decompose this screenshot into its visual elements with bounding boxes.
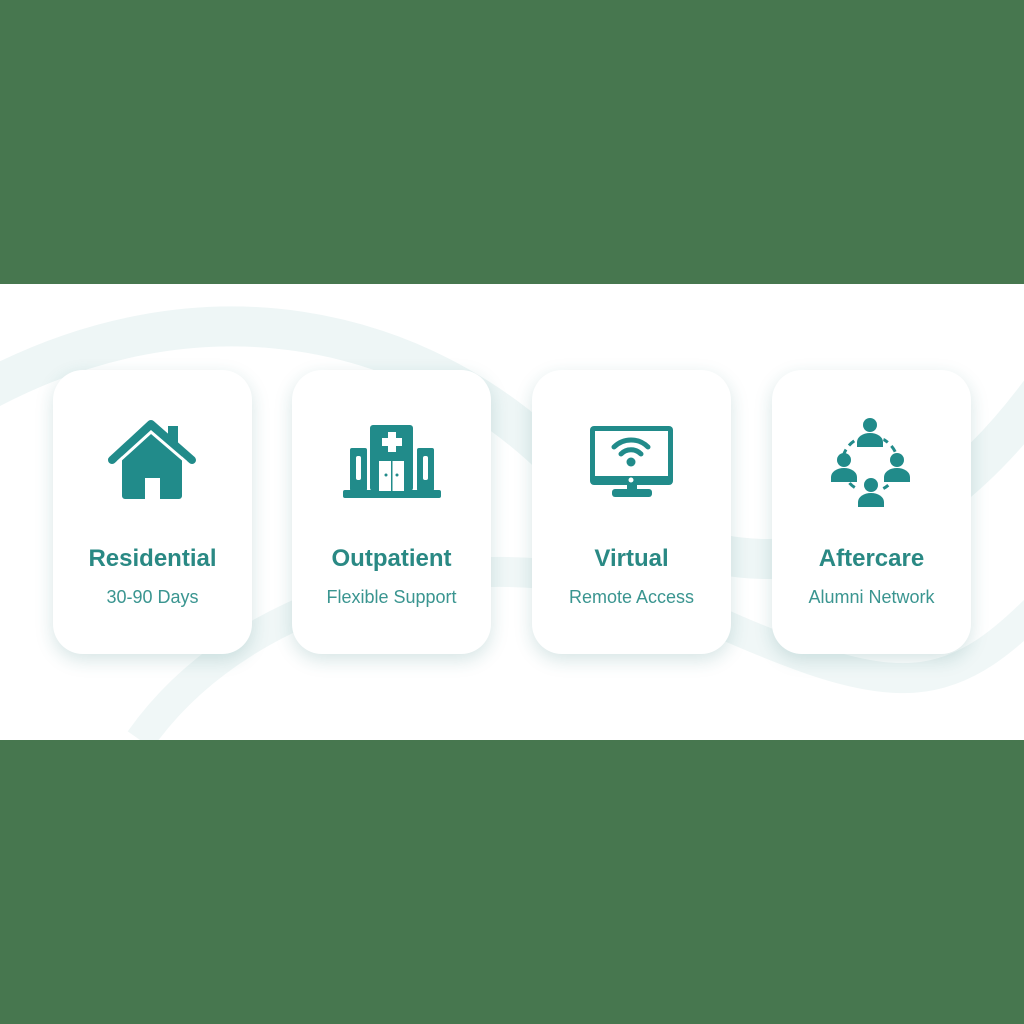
card: virtual: Remote Access — [569, 587, 694, 607]
card: outpatient: Flexible Support — [326, 587, 457, 607]
card: aftercare: Aftercare — [819, 545, 924, 572]
card: virtual — [532, 370, 731, 654]
icon: house — [108, 420, 196, 499]
card: residential: 30-90 Days — [106, 587, 199, 607]
card: residential — [53, 370, 252, 654]
card: aftercare: Alumni Network — [808, 587, 935, 607]
card: virtual: Virtual — [594, 545, 669, 572]
icon: people network — [831, 418, 910, 507]
card: residential: Residential — [88, 545, 217, 572]
background band — [0, 284, 1024, 740]
card: outpatient — [292, 370, 491, 654]
card: outpatient: Outpatient — [332, 545, 452, 572]
icon: hospital — [343, 425, 441, 498]
card: aftercare — [772, 370, 971, 654]
icon: monitor wifi — [590, 426, 673, 497]
